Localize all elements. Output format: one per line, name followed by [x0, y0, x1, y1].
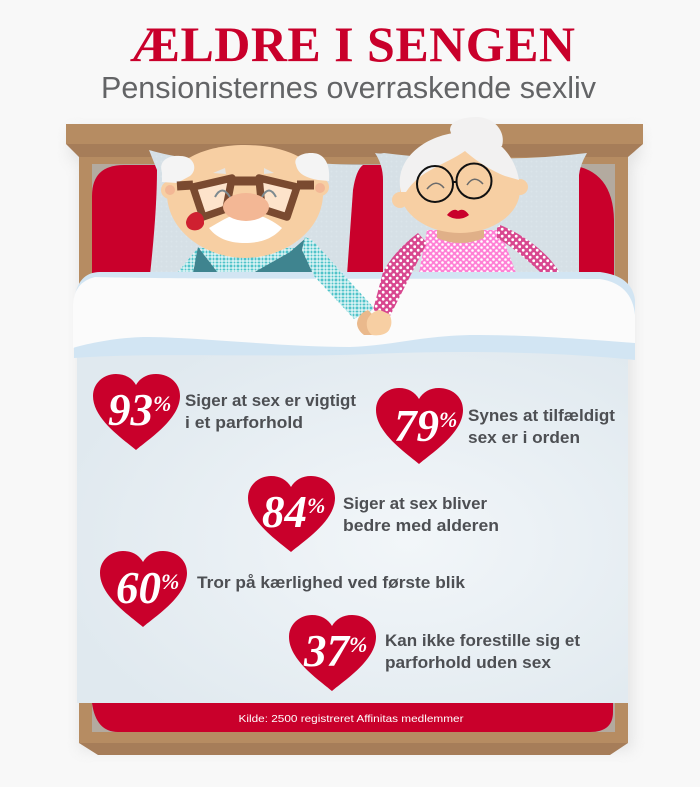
- sheet: [77, 345, 628, 703]
- bed frame: [66, 124, 643, 755]
- title: ÆLDRE I SENGEN: [130, 16, 575, 72]
- lips: [447, 210, 469, 219]
- stat: 93%: %: [153, 391, 171, 416]
- subtitle: Pensionisternes overraskende sexliv: [101, 70, 596, 105]
- bed shadow: [70, 130, 640, 750]
- eyebrows: [213, 168, 274, 174]
- man: [161, 145, 329, 273]
- glasses: [177, 178, 314, 217]
- head: [167, 145, 323, 258]
- stat: 84%: %: [307, 493, 325, 518]
- neck and dress: [419, 225, 559, 273]
- shirt and vest: [177, 237, 316, 273]
- hair: [400, 132, 519, 192]
- stat: 93%: [93, 374, 357, 450]
- stat: 79%: 79: [394, 401, 439, 451]
- stat: 84%: Siger at sex bliver: [343, 495, 488, 513]
- man's arm: [302, 237, 375, 319]
- glasses: [417, 164, 492, 202]
- eyes: [215, 190, 276, 197]
- stat: 37%: %: [349, 632, 367, 657]
- ears: [161, 178, 329, 199]
- stat: 37%: 37: [304, 626, 349, 676]
- blanket: [73, 272, 635, 360]
- red headboard cushions: [92, 165, 614, 290]
- stat: 60%: [100, 551, 466, 627]
- stat: 37%: parforhold uden sex: [385, 654, 552, 672]
- stat: 79%: Synes at tilfældigt: [468, 407, 616, 425]
- nose: [223, 193, 269, 221]
- stat: 84%: [248, 476, 499, 552]
- bed: [66, 117, 643, 755]
- stat: 93%: 93: [108, 385, 153, 435]
- stat: 60%: 60: [116, 563, 161, 613]
- moustache: [209, 213, 282, 243]
- hair: [161, 153, 329, 183]
- woman: [392, 117, 559, 273]
- stat: 37%: Kan ikke forestille sig et: [385, 632, 581, 650]
- source: Kilde: 2500 registreret Affinitas medlemmer: [238, 713, 464, 725]
- red footer: [92, 703, 613, 732]
- head: [400, 147, 520, 233]
- stat: 60%: %: [161, 569, 179, 594]
- stat: 93%: Siger at sex er vigtigt: [185, 392, 357, 410]
- stat: 84%: 84: [262, 487, 307, 537]
- woman's arm: [373, 233, 427, 316]
- stat: 93%: i et parforhold: [185, 414, 303, 432]
- eyes: [427, 179, 483, 189]
- bun: [450, 117, 503, 146]
- pillow right: [375, 153, 587, 275]
- stat: 60%: Tror på kærlighed ved første blik: [197, 574, 466, 592]
- ears: [392, 179, 528, 208]
- holding hands: [357, 310, 391, 335]
- stat: 84%: bedre med alderen: [343, 517, 499, 535]
- stat: 79%: %: [439, 407, 457, 432]
- stat: 79%: [376, 388, 616, 464]
- lipstick kiss: [186, 212, 204, 230]
- pillow left: [149, 150, 363, 275]
- stat: 79%: sex er i orden: [468, 429, 580, 447]
- stat: 37%: [289, 615, 581, 691]
